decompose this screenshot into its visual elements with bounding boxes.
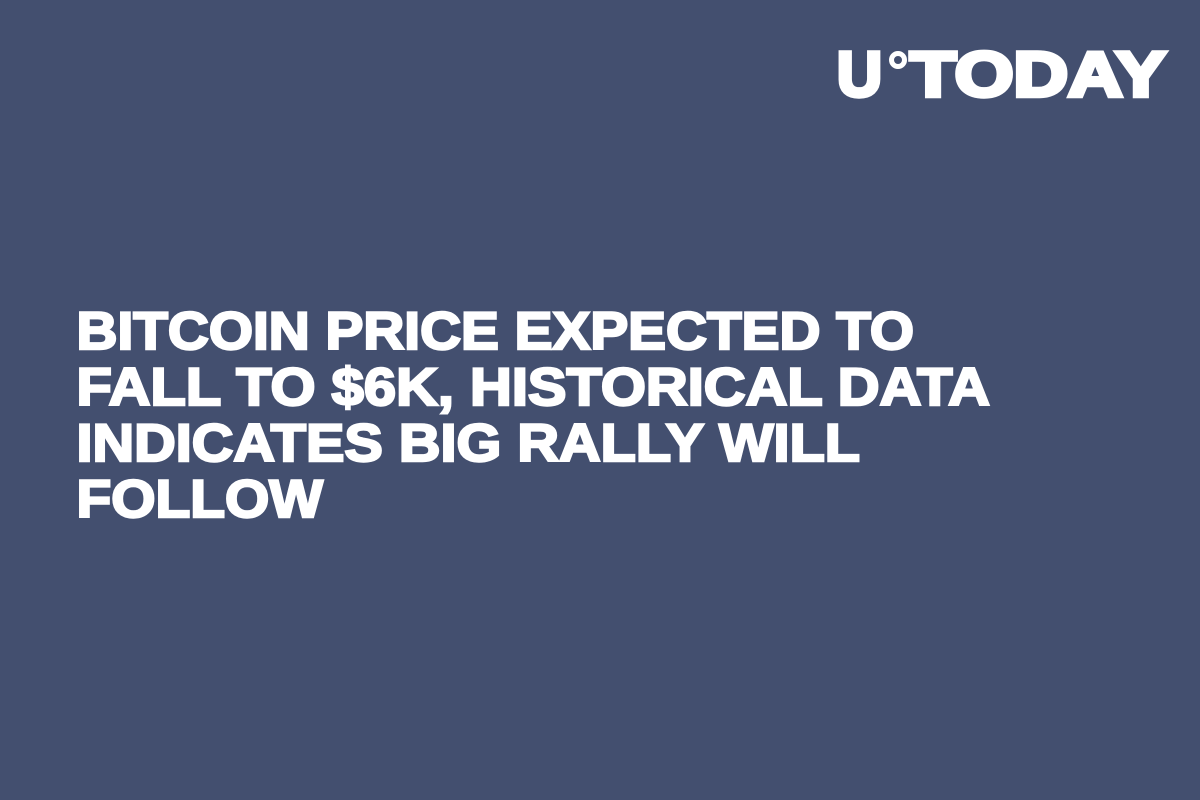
title: FALL TO $6K, HISTORICAL DATA (76, 358, 990, 417)
title: INDICATES BIG RALLY WILL (76, 414, 860, 473)
title: BITCOIN PRICE EXPECTED TO (76, 302, 914, 361)
logo: U.Today: U (837, 40, 882, 110)
title: FOLLOW (76, 470, 323, 529)
logo: U.Today: TODAY (910, 40, 1166, 110)
logo: U.Today (837, 40, 1166, 110)
title (76, 302, 990, 529)
